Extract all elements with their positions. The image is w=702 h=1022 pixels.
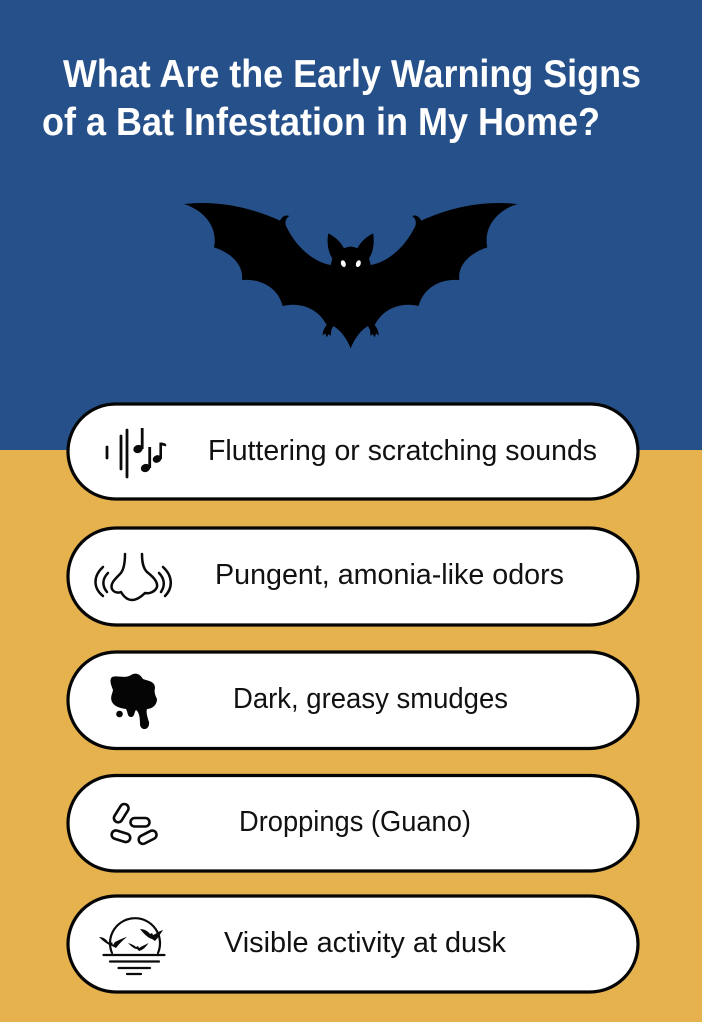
icon: nose with scent waves: [96, 554, 171, 600]
icon: bat silhouette: [184, 203, 517, 348]
panel: pungent odors: [68, 528, 638, 625]
label: Fluttering or scratching sounds: [208, 435, 597, 467]
icon: smudge: [110, 674, 157, 729]
panel: droppings: [68, 776, 638, 871]
label: Visible activity at dusk: [224, 927, 507, 959]
icon: bat eyes: [340, 260, 362, 268]
icon: sunset with bats: [99, 918, 164, 974]
icon: droppings: [111, 802, 158, 845]
blue upper background: [0, 0, 702, 450]
label: Droppings (Guano): [239, 806, 471, 838]
title: What Are the Early Warning Signs: [63, 53, 641, 96]
yellow lower background: [0, 450, 702, 1022]
panel: dark greasy smudges: [68, 652, 638, 748]
panel: visible activity at dusk: [68, 896, 638, 992]
title: [42, 53, 641, 144]
label: Dark, greasy smudges: [233, 683, 508, 715]
panel: fluttering or scratching sounds: [68, 404, 638, 499]
title: of a Bat Infestation in My Home?: [42, 101, 600, 144]
label: Pungent, amonia-like odors: [215, 559, 564, 591]
icon: sound waves and music notes: [107, 428, 166, 477]
